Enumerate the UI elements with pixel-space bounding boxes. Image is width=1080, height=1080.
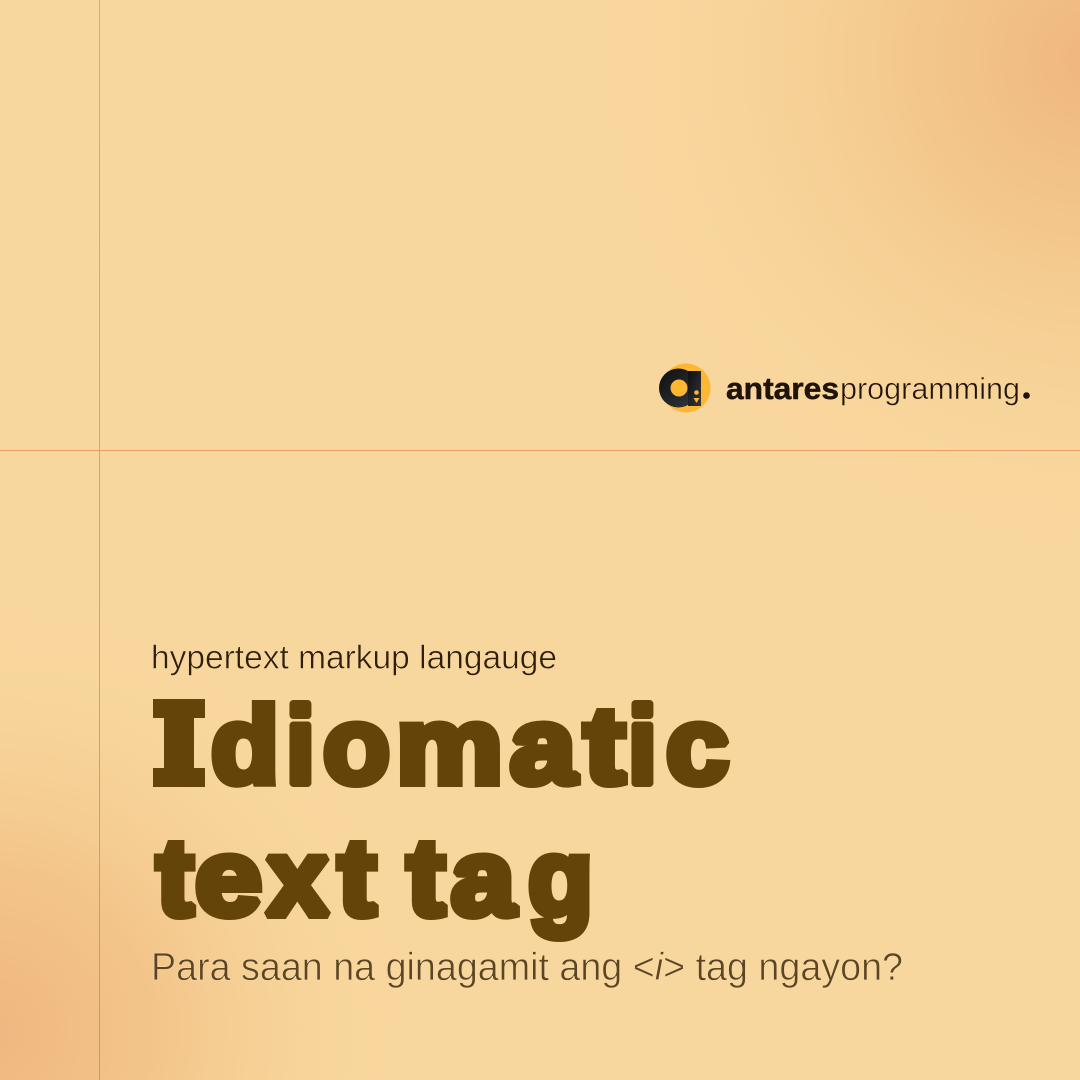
- title line 2: t: [338, 817, 376, 939]
- horizontal guide line: [0, 450, 1080, 451]
- title line 2: x: [266, 817, 328, 939]
- eyebrow text: hypertext markup langauge: [151, 638, 557, 676]
- title: [153, 685, 729, 939]
- subtitle: Para saan na ginagamit ang <i> tag ngayon?: [151, 946, 903, 989]
- icon: antares mark: [659, 364, 710, 412]
- title line 1: m: [396, 685, 503, 807]
- title line 1: c: [666, 685, 729, 807]
- title line 2: e: [195, 817, 262, 939]
- wordmark: antares: [726, 371, 839, 406]
- title line 1: d: [211, 685, 279, 807]
- title line 1: t: [584, 685, 625, 807]
- title line 1: i: [286, 685, 315, 807]
- title line 2: g: [528, 817, 593, 939]
- title line 2: t: [156, 817, 194, 939]
- title line 2: t: [407, 817, 445, 939]
- vertical guide line: [99, 0, 100, 1080]
- title line 1: i: [628, 685, 657, 807]
- title line 1: a: [510, 685, 577, 807]
- title line 2: a: [451, 817, 516, 939]
- title line 1: o: [323, 685, 390, 807]
- logo: antares programming: [659, 364, 1030, 412]
- title line 1: [153, 685, 729, 807]
- logo: antares programming: programming: [840, 371, 1020, 406]
